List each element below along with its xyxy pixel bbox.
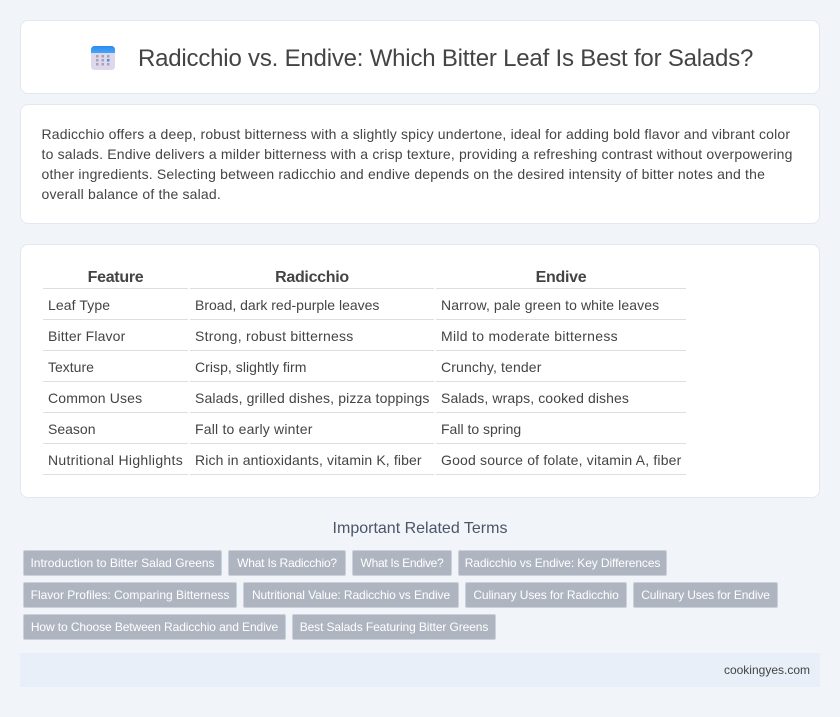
related terms tags: Nutritional Value: Radicchio vs Endive <box>252 588 450 602</box>
header panel <box>20 20 820 94</box>
related terms tags: Culinary Uses for Endive <box>641 588 770 602</box>
comparison table: Leaf Type <box>48 297 110 313</box>
intro paragraph: Radicchio offers a deep, robust bitterness with a slightly spicy undertone, ideal for adding bold flavor and vibrant color <box>42 126 790 142</box>
comparison table: Season <box>48 421 95 437</box>
comparison table: Fall to early winter <box>195 421 313 437</box>
comparison table: Salads, grilled dishes, pizza toppings <box>195 390 430 406</box>
intro paragraph: other ingredients. Selecting between radicchio and endive depends on the desired intensity of bitter notes and the <box>42 166 765 182</box>
comparison table: Crisp, slightly firm <box>195 359 306 375</box>
related terms tags: Flavor Profiles: Comparing Bitterness <box>31 588 229 602</box>
comparison table <box>43 269 686 475</box>
related terms tags: Culinary Uses for Radicchio <box>473 588 619 602</box>
icon: calendar <box>91 46 115 70</box>
comparison table: Broad, dark red-purple leaves <box>195 297 379 313</box>
intro paragraph <box>42 126 793 202</box>
intro paragraph: to salads. Endive delivers a milder bitterness with a crisp texture, providing a refreshing contrast without overpowering <box>42 146 793 162</box>
comparison table: Mild to moderate bitterness <box>441 328 618 344</box>
comparison table: Crunchy, tender <box>441 359 542 375</box>
related terms tags: What Is Radicchio? <box>237 556 337 570</box>
related terms tags: Best Salads Featuring Bitter Greens <box>300 620 488 634</box>
related terms tags: What Is Endive? <box>361 556 443 570</box>
comparison table: Bitter Flavor <box>48 328 125 344</box>
footer source text: cookingyes.com <box>724 663 810 677</box>
related terms tags: Introduction to Bitter Salad Greens <box>30 556 215 570</box>
comparison table: Rich in antioxidants, vitamin K, fiber <box>195 452 422 468</box>
related terms tags <box>23 550 778 640</box>
related terms heading: Important Related Terms <box>333 520 507 537</box>
related terms tags: Radicchio vs Endive: Key Differences <box>465 556 660 570</box>
comparison table panel <box>20 244 820 498</box>
comparison table: Feature <box>88 269 143 286</box>
comparison table: Good source of folate, vitamin A, fiber <box>441 452 681 468</box>
title: Radicchio vs. Endive: Which Bitter Leaf Is Best for Salads? <box>138 45 753 72</box>
comparison table: Texture <box>48 359 94 375</box>
comparison table: Narrow, pale green to white leaves <box>441 297 659 313</box>
comparison table: Common Uses <box>48 390 142 406</box>
intro paragraph: overall balance of the salad. <box>42 186 221 202</box>
comparison table: Salads, wraps, cooked dishes <box>441 390 629 406</box>
footer bar <box>20 653 820 687</box>
comparison table: Strong, robust bitterness <box>195 328 354 344</box>
comparison table: Nutritional Highlights <box>48 452 183 468</box>
comparison table: Radicchio <box>275 269 349 286</box>
comparison table: Endive <box>536 269 586 286</box>
comparison table: Fall to spring <box>441 421 521 437</box>
intro text panel <box>20 104 820 224</box>
related terms tags: How to Choose Between Radicchio and Endive <box>31 620 278 634</box>
